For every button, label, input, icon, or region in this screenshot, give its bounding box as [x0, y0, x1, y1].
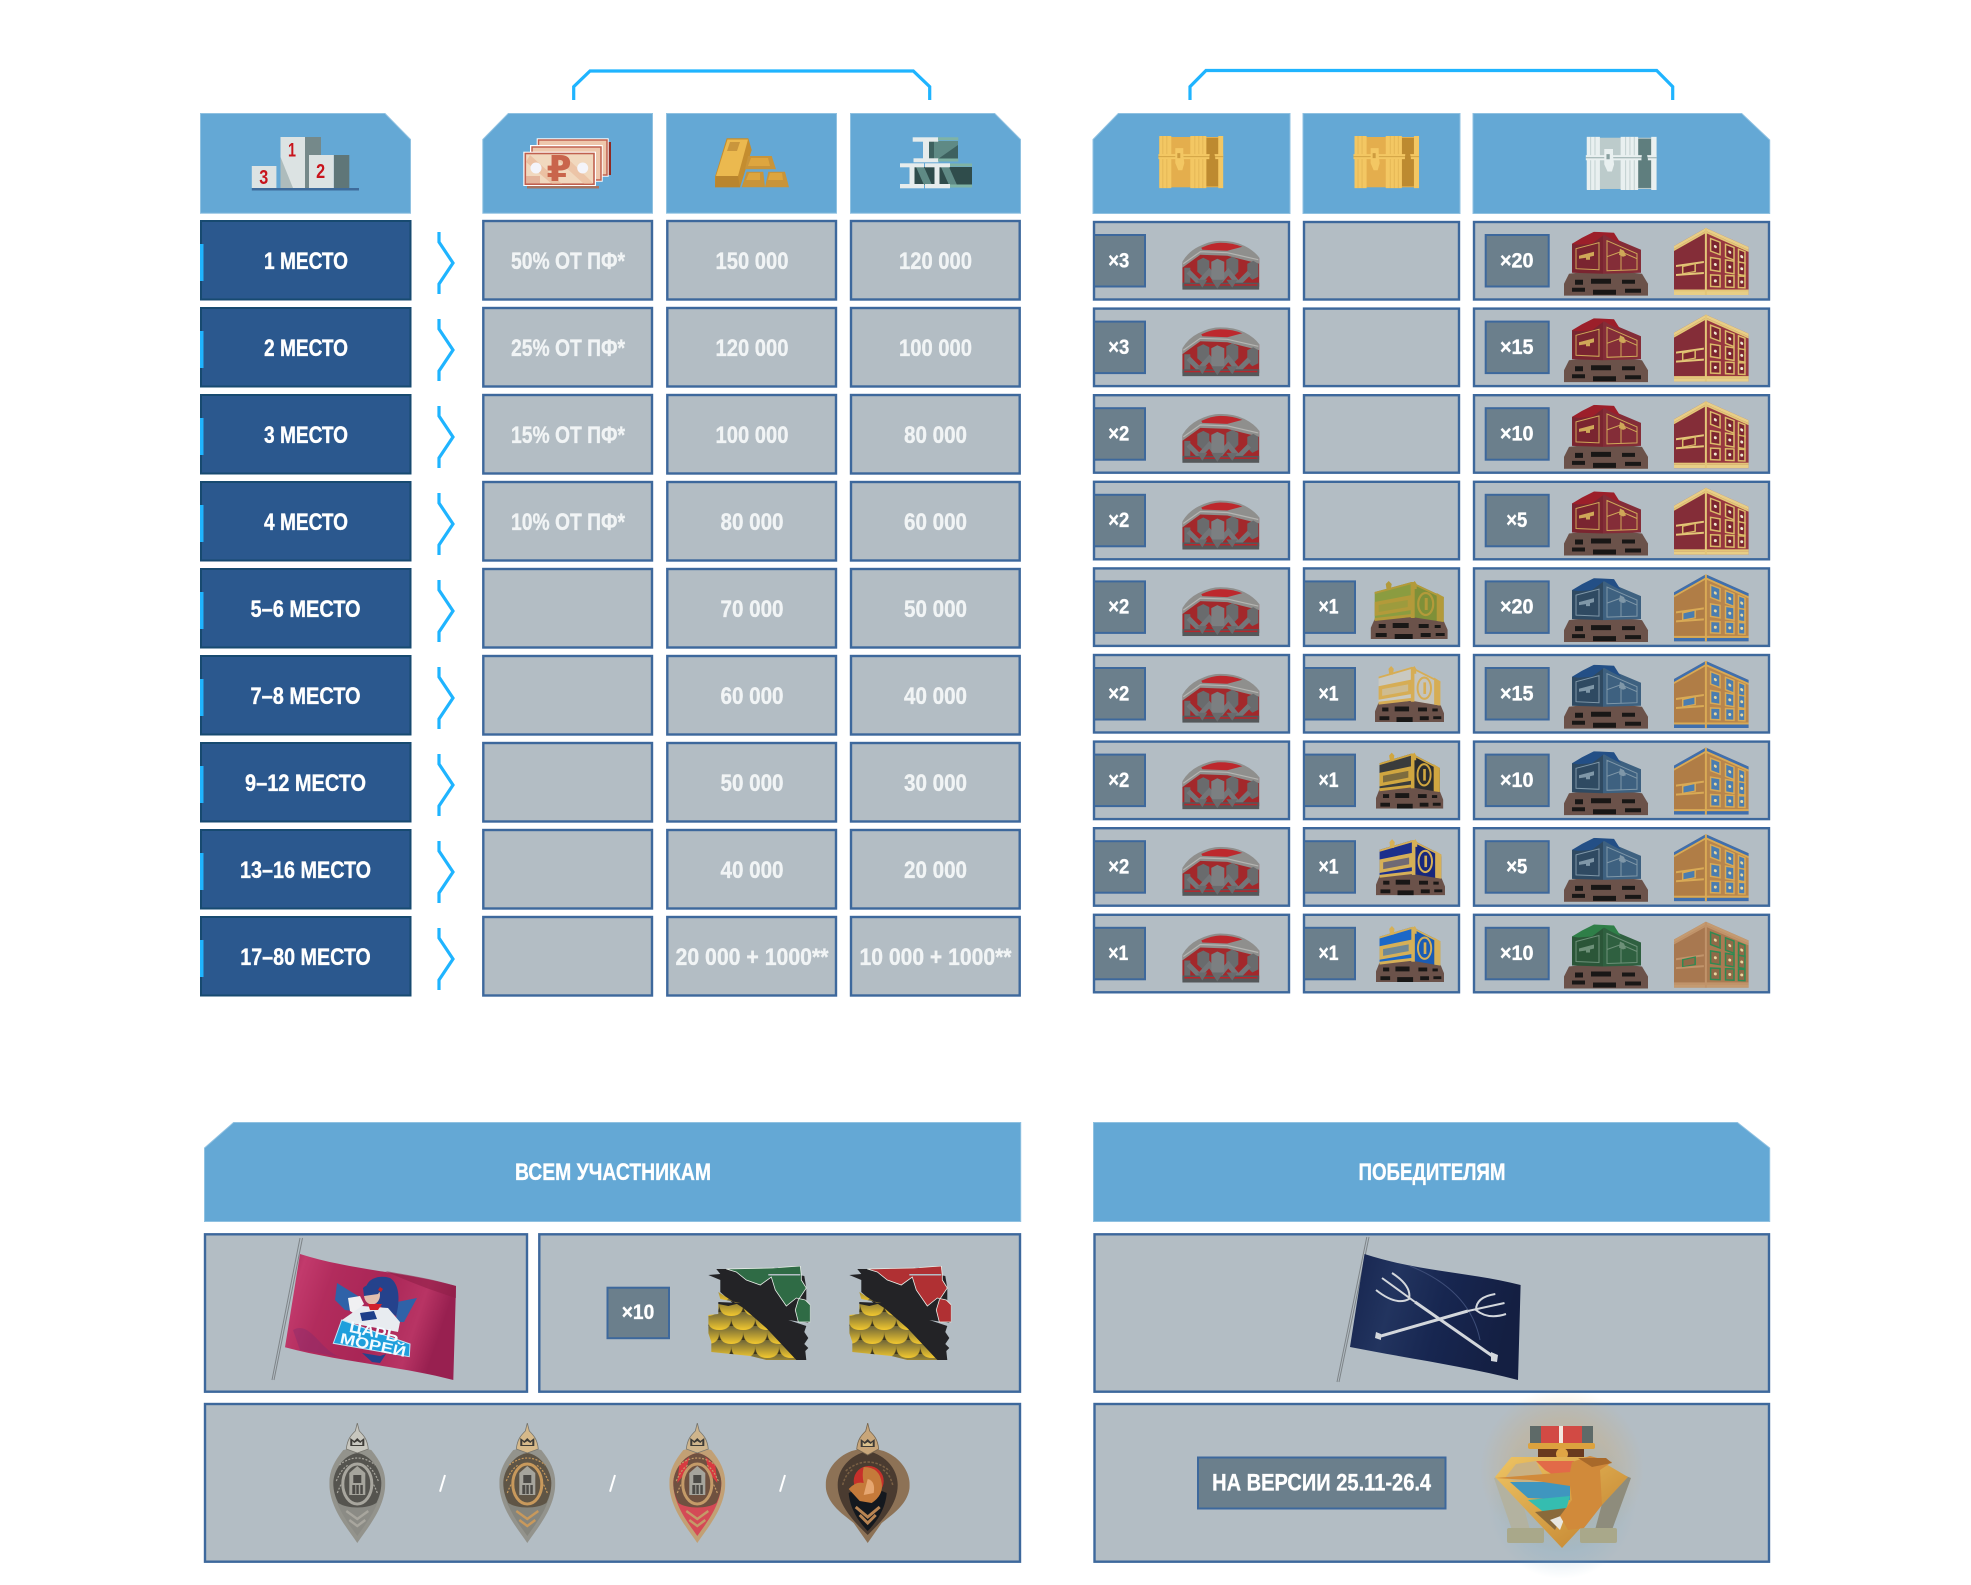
- panel: winner medal: [1094, 1388, 1769, 1579]
- bracket: container rewards: [1190, 70, 1673, 100]
- row: 7-8 place, containers: ×1: [1318, 681, 1339, 705]
- row: 9-12 place, containers: [1094, 742, 1769, 819]
- row: 5-6 place, containers: ×1: [1318, 595, 1339, 619]
- icon: gold badge: [826, 1423, 910, 1543]
- row: 3 place, containers: [1094, 395, 1769, 473]
- label: versions: [1198, 1458, 1446, 1508]
- icon: gold chest: [1354, 136, 1419, 188]
- row: 4 place, containers: ×2: [1108, 508, 1129, 532]
- icon: podium: 3: [259, 167, 268, 189]
- row: 7-8 place, containers: [1094, 655, 1769, 732]
- row: 9-12 place, currency: 50 000: [720, 770, 784, 797]
- row: 9-12 place, containers: ×10: [1500, 768, 1533, 792]
- row: 9-12 place, containers: ×2: [1108, 768, 1129, 792]
- row: 17-80 place, currency: 17–80 МЕСТО: [240, 944, 371, 971]
- row: 17-80 place, containers: ×1: [1318, 941, 1339, 965]
- row: 13-16 place, currency: 20 000: [904, 857, 967, 884]
- row: 3 place, containers: ×10: [1500, 422, 1533, 446]
- row: 13-16 place, containers: [1094, 828, 1769, 906]
- heading: all participants: [204, 1122, 1021, 1222]
- row: 2 place, containers: ×15: [1500, 335, 1533, 359]
- row: 3 place, currency: [200, 395, 1020, 474]
- icon: camouflage red: [849, 1266, 951, 1360]
- header: chest 2: [1303, 114, 1460, 214]
- row: 2 place, containers: ×3: [1108, 335, 1129, 359]
- icon: red badge: [669, 1423, 725, 1543]
- icon: camouflage green: [708, 1266, 810, 1360]
- icon: podium: 1: [288, 140, 296, 162]
- icon: silver chest: [1586, 137, 1657, 190]
- icon: podium: [252, 137, 359, 190]
- row: 2 place, currency: 2 МЕСТО: [264, 335, 348, 362]
- row: 13-16 place, containers: ×5: [1506, 855, 1527, 879]
- row: 5-6 place, currency: 5–6 МЕСТО: [250, 596, 360, 623]
- heading: winners: [1094, 1122, 1770, 1222]
- icon: banknotes: [523, 138, 611, 189]
- row: 7-8 place, currency: 7–8 МЕСТО: [250, 683, 360, 710]
- icon: podium: 2: [316, 161, 325, 183]
- panel: winner flag: [1094, 1234, 1769, 1392]
- heading: winners: ПОБЕДИТЕЛЯМ: [1358, 1159, 1506, 1186]
- row: 7-8 place, containers: ×2: [1108, 681, 1129, 705]
- row: 17-80 place, currency: 10 000 + 1000**: [860, 944, 1012, 971]
- icon: silver badge: [329, 1423, 385, 1543]
- row: 17-80 place, currency: 20 000 + 1000**: [676, 944, 829, 971]
- label: versions: НА ВЕРСИИ 25.11-26.4: [1212, 1470, 1432, 1497]
- row: 5-6 place, currency: [200, 569, 1020, 648]
- row: 17-80 place, containers: [1094, 915, 1769, 992]
- icon: tridents flag: [1337, 1237, 1521, 1382]
- row: 1 place, containers: ×3: [1108, 248, 1129, 272]
- icon: flag "Царь морей": МОРЕЙ: [338, 1329, 408, 1361]
- row: 1 place, currency: 150 000: [716, 248, 788, 275]
- row: 13-16 place, containers: ×1: [1318, 855, 1339, 879]
- row: 2 place, currency: 120 000: [716, 335, 788, 362]
- icon: gold bars: [715, 138, 789, 187]
- panel: participant flag: [205, 1234, 527, 1392]
- row: 4 place, currency: 80 000: [720, 509, 784, 536]
- row: 3 place, containers: ×2: [1108, 422, 1129, 446]
- header: money: [483, 114, 652, 213]
- icon: medal: [1480, 1388, 1644, 1579]
- row: 9-12 place, containers: ×1: [1318, 768, 1339, 792]
- row: 1 place, containers: [1094, 222, 1769, 300]
- separator: [610, 1475, 615, 1492]
- row: 17-80 place, currency: [200, 917, 1020, 996]
- row: 4 place, currency: 4 МЕСТО: [264, 509, 348, 536]
- row: 4 place, currency: [200, 482, 1020, 560]
- separator: [440, 1475, 445, 1492]
- row: 5-6 place, containers: ×20: [1500, 595, 1533, 619]
- header: chest 3: [1473, 114, 1770, 214]
- row: 4 place, currency: 10% ОТ ПФ*: [511, 509, 626, 536]
- icon: flag "Царь морей": ЦАРЬ: [348, 1319, 400, 1346]
- row: 2 place, currency: 25% ОТ ПФ*: [511, 335, 626, 362]
- multiplier: x10: ×10: [622, 1300, 654, 1324]
- header: steel: [850, 114, 1020, 213]
- row: 1 place, containers: ×20: [1500, 248, 1533, 272]
- header: place: [200, 114, 410, 213]
- icon: banknotes: ₽: [546, 148, 572, 189]
- separator: [780, 1475, 785, 1492]
- icon: flag "Царь морей": [272, 1238, 456, 1380]
- header: chest 1: [1093, 114, 1290, 214]
- row: 3 place, currency: 15% ОТ ПФ*: [511, 422, 626, 449]
- row: 13-16 place, currency: 13–16 МЕСТО: [240, 857, 371, 884]
- row: 1 place, currency: [200, 221, 1020, 300]
- row: 9-12 place, currency: [200, 743, 1020, 822]
- bracket: currency rewards: [574, 71, 930, 100]
- row: 13-16 place, currency: 40 000: [720, 857, 784, 884]
- row: 9-12 place, currency: 30 000: [904, 770, 967, 797]
- row: 17-80 place, containers: ×1: [1108, 941, 1128, 965]
- icon: steel beams: [900, 137, 972, 188]
- header: gold: [666, 114, 836, 213]
- row: 7-8 place, currency: 40 000: [904, 683, 967, 710]
- row: 7-8 place, containers: ×15: [1500, 681, 1533, 705]
- row: 1 place, currency: 50% ОТ ПФ*: [511, 248, 626, 275]
- row: 4 place, containers: [1094, 482, 1769, 559]
- row: 17-80 place, containers: ×10: [1500, 941, 1533, 965]
- row: 1 place, currency: 120 000: [899, 248, 972, 275]
- heading: all participants: ВСЕМ УЧАСТНИКАМ: [515, 1159, 711, 1186]
- row: 4 place, containers: ×5: [1506, 508, 1527, 532]
- row: 1 place, currency: 1 МЕСТО: [264, 248, 348, 275]
- icon: gold chest: [1158, 136, 1223, 188]
- row: 4 place, currency: 60 000: [904, 509, 967, 536]
- row: 3 place, currency: 3 МЕСТО: [264, 422, 348, 449]
- row: 13-16 place, containers: ×2: [1108, 855, 1129, 879]
- row: 3 place, currency: 100 000: [716, 422, 788, 449]
- row: 5-6 place, currency: 50 000: [904, 596, 967, 623]
- row: 2 place, containers: [1094, 309, 1769, 386]
- row: 13-16 place, currency: [200, 830, 1020, 908]
- row: 5-6 place, containers: [1094, 568, 1769, 646]
- multiplier: x10: [608, 1288, 669, 1338]
- row: 5-6 place, currency: 70 000: [720, 596, 784, 623]
- row: 3 place, currency: 80 000: [904, 422, 967, 449]
- row: 9-12 place, currency: 9–12 МЕСТО: [245, 770, 366, 797]
- row: 5-6 place, containers: ×2: [1108, 595, 1129, 619]
- row: 7-8 place, currency: [200, 656, 1020, 734]
- panel: badges: [205, 1404, 1020, 1562]
- panel: camouflages: [539, 1234, 1020, 1392]
- row: 2 place, currency: [200, 308, 1020, 386]
- icon: bronze badge: [499, 1423, 555, 1543]
- row: 7-8 place, currency: 60 000: [720, 683, 784, 710]
- row: 2 place, currency: 100 000: [899, 335, 972, 362]
